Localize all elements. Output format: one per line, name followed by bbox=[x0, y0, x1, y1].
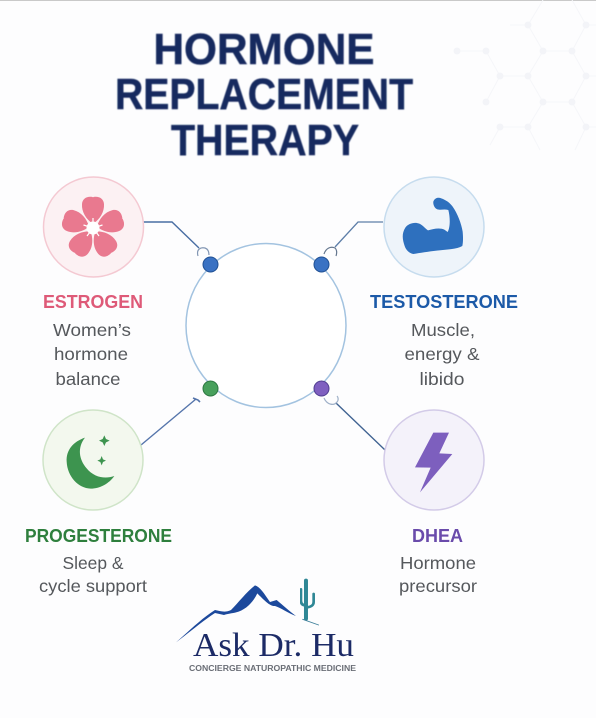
heading: dhea: DHEA bbox=[412, 526, 463, 546]
description: testosterone bbox=[404, 320, 480, 389]
description: testosterone: libido bbox=[420, 369, 464, 389]
ring node: testosterone bbox=[314, 257, 329, 272]
panel: dhea bbox=[384, 410, 484, 596]
icon: flexed arm bbox=[384, 177, 484, 277]
description: estrogen: hormone bbox=[54, 344, 128, 364]
title: HORMONE bbox=[154, 25, 374, 74]
description: estrogen bbox=[53, 320, 131, 389]
ring node: estrogen bbox=[203, 257, 218, 272]
icon: mountain bbox=[176, 585, 296, 642]
title: THERAPY bbox=[171, 116, 359, 165]
description: estrogen: balance bbox=[56, 369, 120, 389]
panel: testosterone bbox=[370, 177, 518, 389]
connector: testosterone bbox=[324, 222, 383, 256]
description: dhea: precursor bbox=[399, 576, 477, 596]
heading: estrogen: ESTROGEN bbox=[43, 292, 143, 312]
description: dhea: Hormone bbox=[400, 553, 476, 573]
heading: testosterone: TESTOSTERONE bbox=[370, 292, 518, 312]
panel: progesterone bbox=[25, 410, 172, 596]
title: REPLACEMENT bbox=[115, 70, 413, 119]
description: progesterone: Sleep & bbox=[62, 553, 124, 573]
logo tagline: CONCIERGE NATUROPATHIC MEDICINE bbox=[189, 664, 357, 673]
icon: lightning bolt bbox=[384, 410, 484, 510]
connector: dhea bbox=[324, 396, 385, 450]
icon: cactus bbox=[301, 581, 319, 625]
ring node: dhea bbox=[314, 381, 329, 396]
description: testosterone: energy & bbox=[404, 344, 480, 364]
description: progesterone bbox=[39, 553, 147, 596]
title bbox=[115, 25, 413, 165]
logo: Ask Dr. Hu bbox=[176, 581, 357, 673]
connector: progesterone bbox=[141, 398, 200, 445]
icon: flower bbox=[44, 177, 144, 277]
logo wordmark: Ask Dr. Hu bbox=[193, 627, 354, 664]
connector: estrogen bbox=[143, 222, 209, 256]
description: testosterone: Muscle, bbox=[411, 320, 475, 340]
description: dhea bbox=[399, 553, 477, 596]
icon: moon and stars bbox=[43, 410, 143, 510]
description: estrogen: Women’s bbox=[53, 320, 131, 340]
ring node: progesterone bbox=[203, 381, 218, 396]
panel: estrogen bbox=[43, 177, 144, 389]
hexagon background pattern bbox=[454, 0, 596, 150]
central ring bbox=[186, 244, 346, 408]
heading: progesterone: PROGESTERONE bbox=[25, 526, 172, 546]
description: progesterone: cycle support bbox=[39, 576, 147, 596]
